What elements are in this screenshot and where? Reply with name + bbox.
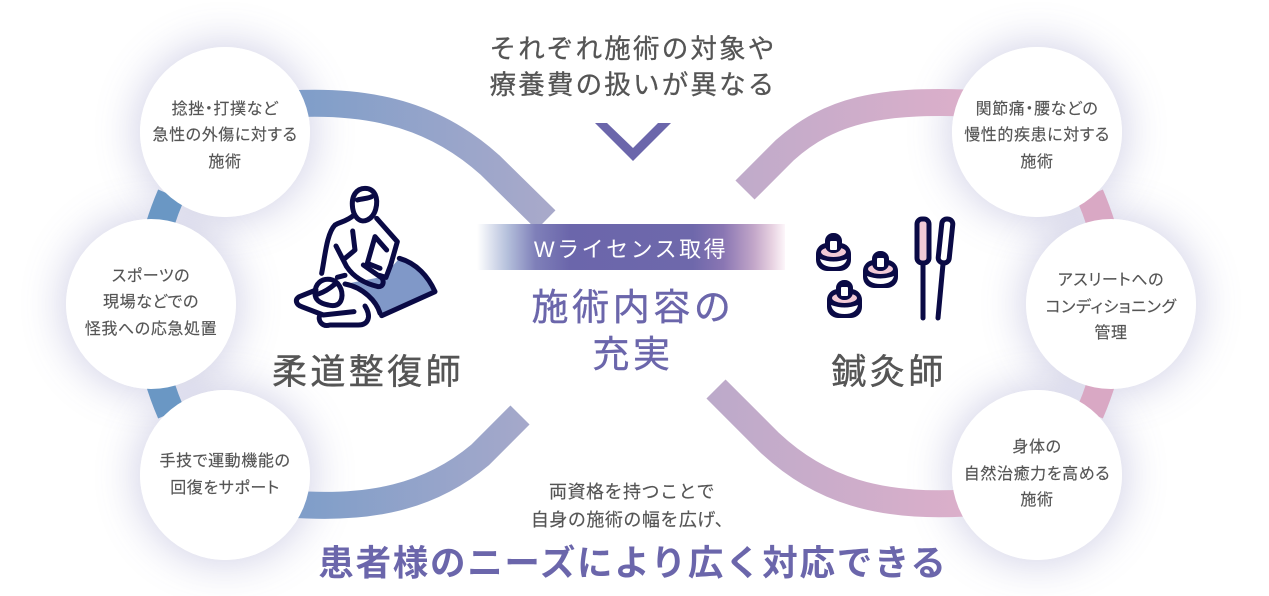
label: judo therapist: 柔道整復師 (272, 353, 464, 392)
heading: different treatment scope: それぞれ施術の対象や (490, 34, 776, 64)
chevron arrow (595, 123, 671, 161)
moxa 1 (816, 233, 851, 271)
circle: sports first aid: 現場などでの (103, 294, 199, 311)
needle 2 (938, 218, 953, 318)
text: expanded range (531, 482, 733, 530)
circle: sports first aid (66, 219, 236, 389)
moxa 2 (863, 251, 898, 288)
circle: acute injury (140, 47, 310, 217)
circle: chronic disease: 慢性的疾患に対する (964, 127, 1110, 144)
conclusion heading: 患者様のニーズにより広く対応できる (318, 543, 948, 583)
circle: chronic disease (952, 47, 1122, 217)
heading: different treatment scope (490, 34, 776, 100)
center heading (532, 287, 734, 375)
circle: chronic disease: 施術 (1020, 154, 1054, 171)
text: expanded range: 自身の施術の幅を広げ、 (531, 510, 733, 530)
center heading: 施術内容の (532, 287, 734, 328)
heading: different treatment scope: 療養費の扱いが異なる (490, 70, 776, 100)
center heading: 充実 (592, 334, 674, 375)
circle: natural healing: 施術 (1020, 492, 1054, 509)
needle 1 (917, 219, 929, 318)
icon: massage therapist and patient (294, 186, 438, 328)
icon: moxa and needles (816, 216, 956, 320)
banner: double license: Wライセンス取得 (534, 237, 728, 262)
label: acupuncturist: 鍼灸師 (831, 353, 947, 392)
circle: athlete conditioning: 管理 (1094, 325, 1128, 342)
banner: double license (477, 224, 785, 270)
circle: natural healing: 自然治癒力を高める (964, 466, 1110, 483)
circle: acute injury: 急性の外傷に対する (152, 127, 298, 144)
circle: sports first aid: スポーツの (112, 268, 190, 285)
circle: chronic disease: 関節痛・腰などの (976, 101, 1098, 118)
moxa 3 (827, 280, 862, 318)
circle: athlete conditioning: コンディショニング (1045, 299, 1177, 316)
circle: acute injury: 捻挫・打撲など (172, 101, 278, 118)
text: expanded range: 両資格を持つことで (549, 482, 715, 502)
circle: natural healing (952, 390, 1122, 560)
circle: manual support: 手技で運動機能の (159, 453, 290, 470)
circle: athlete conditioning (1026, 219, 1196, 389)
circle: manual support: 回復をサポート (170, 480, 280, 496)
circle: athlete conditioning: アスリートへの (1058, 272, 1164, 289)
circle: manual support (140, 390, 310, 560)
circle: acute injury: 施術 (208, 154, 242, 171)
circle: sports first aid: 怪我への応急処置 (85, 321, 217, 338)
circle: natural healing: 身体の (1012, 439, 1062, 456)
